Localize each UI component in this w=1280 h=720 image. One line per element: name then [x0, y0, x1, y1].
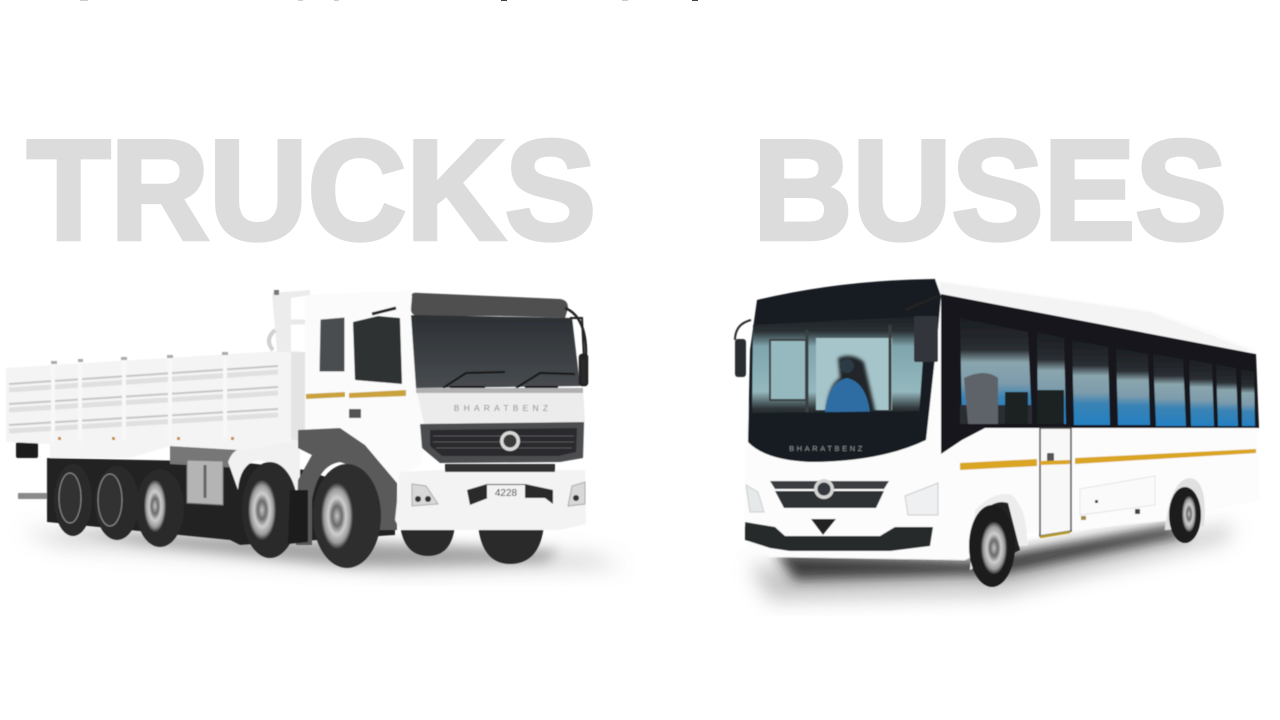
heading: TRUCKS: TRUCKS	[27, 111, 596, 270]
bus rear wheel	[1165, 478, 1205, 543]
truck wheel arch	[296, 428, 397, 545]
bus roof highlight	[940, 282, 1250, 352]
bus front name text: BHARATBENZ	[789, 444, 865, 453]
bus mirrors	[735, 296, 938, 377]
truck mirrors	[372, 308, 587, 385]
truck sun visor	[411, 293, 568, 318]
bus side window panes	[960, 318, 1255, 426]
bus body	[744, 280, 1259, 560]
illustration: white bus	[735, 279, 1259, 600]
bus front wheel	[969, 494, 1027, 587]
heading: BUSES: BUSES	[753, 111, 1227, 270]
illustration: white truck	[6, 290, 625, 572]
bus ground shadow	[750, 525, 1235, 600]
bus driver	[825, 359, 870, 412]
truck steer wheels	[242, 462, 381, 568]
bus lower bumper	[745, 519, 933, 551]
truck chassis	[47, 458, 395, 545]
truck wipers	[443, 372, 575, 388]
bus front bay interior and seats	[960, 373, 1064, 424]
bus grille and emblem	[770, 479, 889, 508]
truck bumper: 4228	[495, 488, 518, 499]
truck rear wheels	[54, 464, 184, 547]
truck headboard frame	[269, 290, 312, 440]
bus door frame	[1040, 428, 1071, 537]
truck windshield	[411, 315, 580, 388]
truck door handle	[349, 409, 361, 418]
truck side window	[320, 318, 344, 371]
bus yellow stripe	[960, 449, 1256, 470]
truck bumper	[395, 464, 586, 530]
truck ground shadow	[20, 530, 625, 572]
bus windshield	[752, 316, 926, 427]
truck silver name panel: BHARATBENZ	[454, 403, 552, 413]
truck cab side	[305, 291, 424, 483]
bus side window band	[941, 294, 1259, 454]
truck door window	[353, 316, 402, 384]
truck grille and emblem	[420, 422, 584, 463]
truck rear pipe and hitch	[16, 442, 50, 499]
truck white arch over rear steer wheel	[228, 440, 300, 500]
bus headlights	[746, 483, 938, 515]
truck cargo bed	[6, 351, 300, 462]
bus front mask	[748, 279, 941, 462]
truck silver name panel	[416, 388, 585, 424]
cropped caption remnants	[80, 0, 698, 1]
truck yellow stripe	[306, 390, 406, 399]
truck side box	[170, 446, 240, 505]
truck front wheels under bumper	[400, 525, 544, 564]
bus side panels	[1080, 476, 1155, 520]
